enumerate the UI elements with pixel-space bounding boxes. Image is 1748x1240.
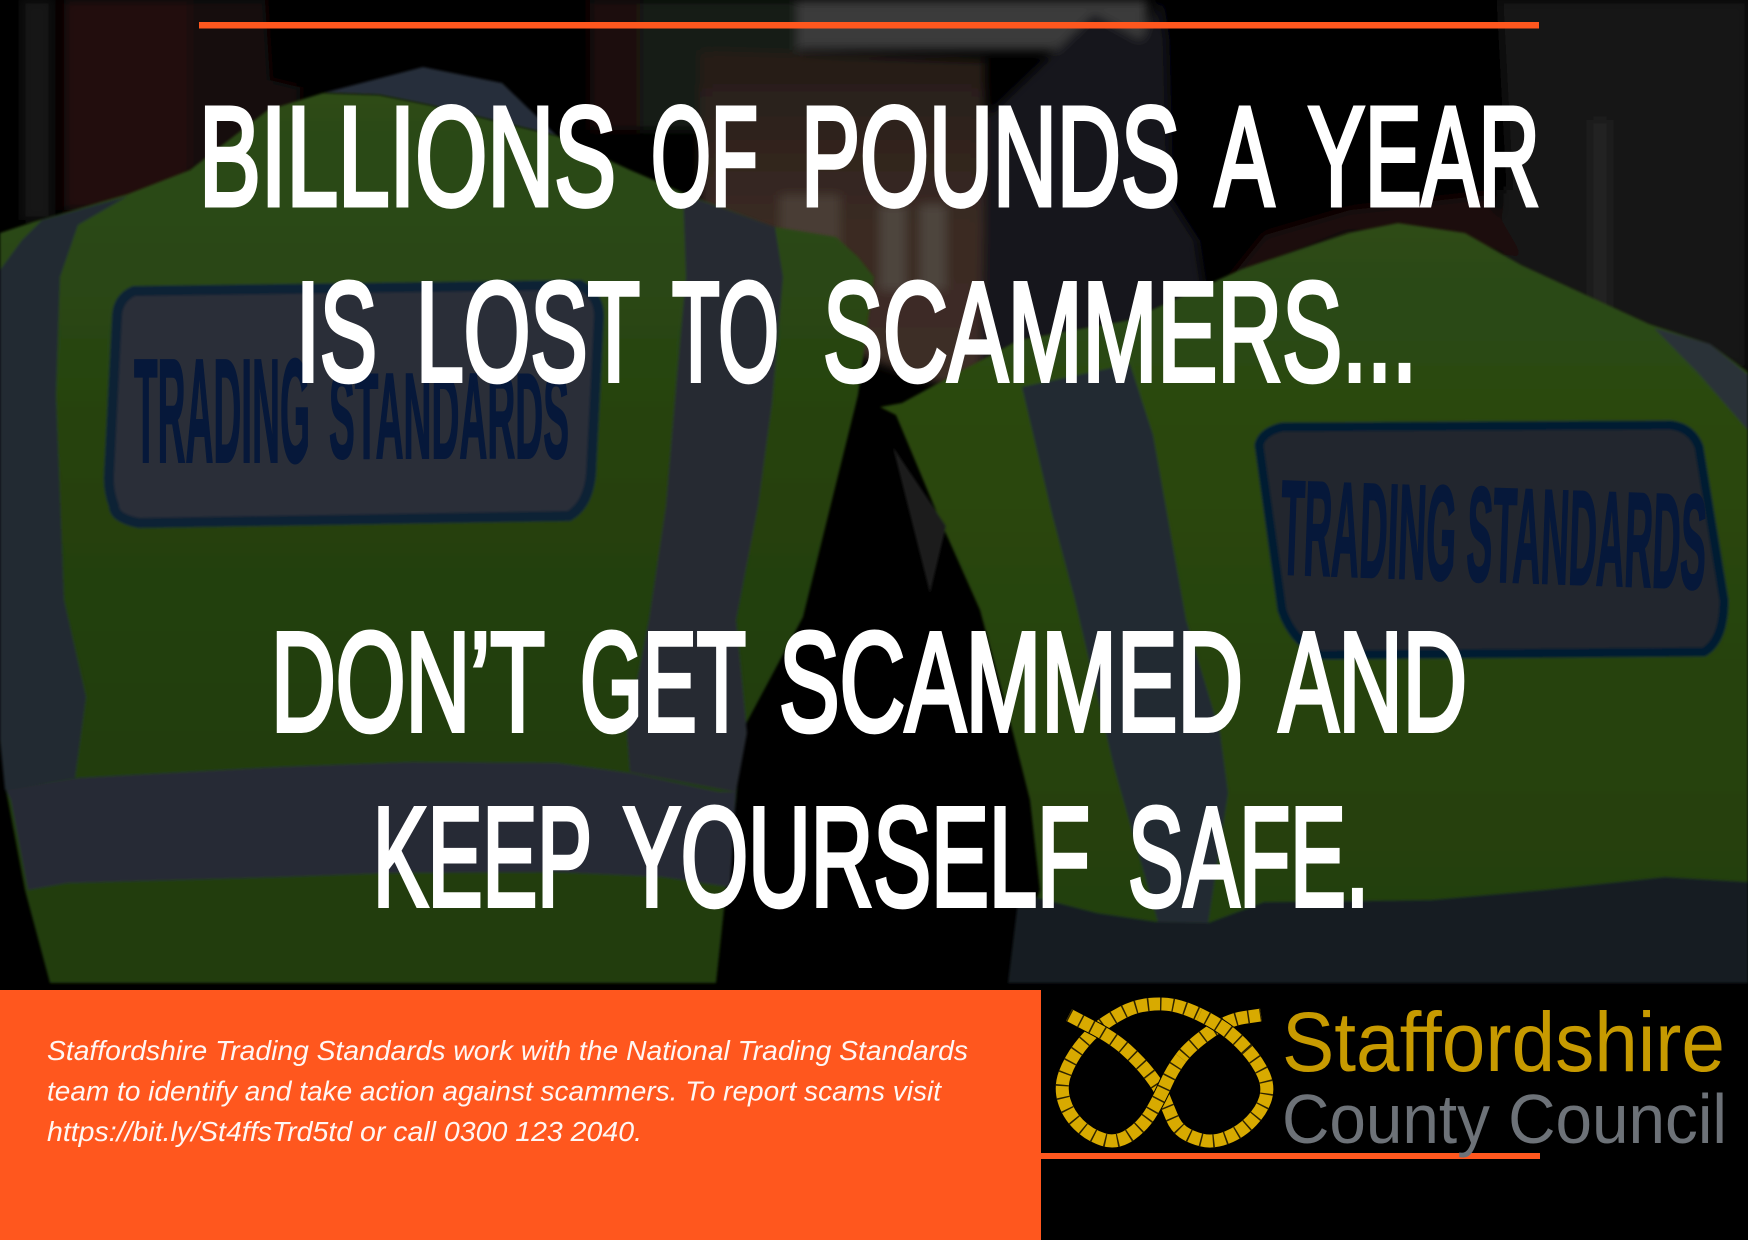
lower orange rule	[1041, 1153, 1540, 1159]
headline: scam losses: TO	[672, 252, 779, 410]
headline: scam losses: OF	[651, 77, 758, 235]
vest lettering: left: TRADING	[134, 329, 310, 494]
left vest	[0, 93, 874, 983]
background photo: two officers in high-visibility vests	[0, 0, 1748, 983]
logo wordmark: County Council: County Council	[1282, 1080, 1727, 1158]
logo: Staffordshire County Council	[1062, 995, 1727, 1158]
top orange rule	[199, 22, 1539, 28]
headline: call to action	[271, 602, 1467, 936]
headline: scam losses: A	[1215, 77, 1274, 235]
headline: scam losses: YEAR	[1308, 77, 1540, 235]
background photo: two officers in high-visibility vests: STANDARDS	[329, 348, 569, 484]
headline: call to action: SAFE.	[1128, 778, 1369, 936]
headline: scam losses: IS	[296, 252, 377, 410]
headline: call to action: GET	[580, 602, 746, 760]
headline: scam losses: SCAMMERS...	[823, 252, 1417, 410]
headline: scam losses: POUNDS	[801, 77, 1180, 235]
headline: scam losses: LOST	[416, 252, 640, 410]
footer text block: https://bit.ly/St4ffsTrd5td or call 0300 123 2040.	[47, 1116, 642, 1147]
headline: scam losses: BILLIONS	[199, 77, 616, 235]
headline: call to action: SCAMMED	[779, 602, 1243, 760]
headline: call to action: KEEP	[373, 778, 592, 936]
headline: call to action: YOURSELF	[623, 778, 1090, 936]
shirt collar	[323, 67, 557, 136]
vest lettering: left	[134, 329, 569, 494]
footer text block	[47, 1035, 968, 1147]
logo wordmark: Staffordshire: Staffordshire	[1282, 995, 1725, 1089]
icon: Staffordshire knot	[1062, 1004, 1267, 1141]
right vest	[880, 223, 1748, 983]
headline: call to action: DON’T	[271, 602, 545, 760]
footer text block: team to identify and take action against scammers. To report scams visit	[47, 1076, 942, 1106]
headline: call to action: AND	[1279, 602, 1467, 760]
headline: scam losses	[199, 77, 1540, 410]
panel: orange information footer	[0, 990, 1041, 1240]
footer text block: Staffordshire Trading Standards work with the National Trading Standards	[47, 1035, 968, 1066]
